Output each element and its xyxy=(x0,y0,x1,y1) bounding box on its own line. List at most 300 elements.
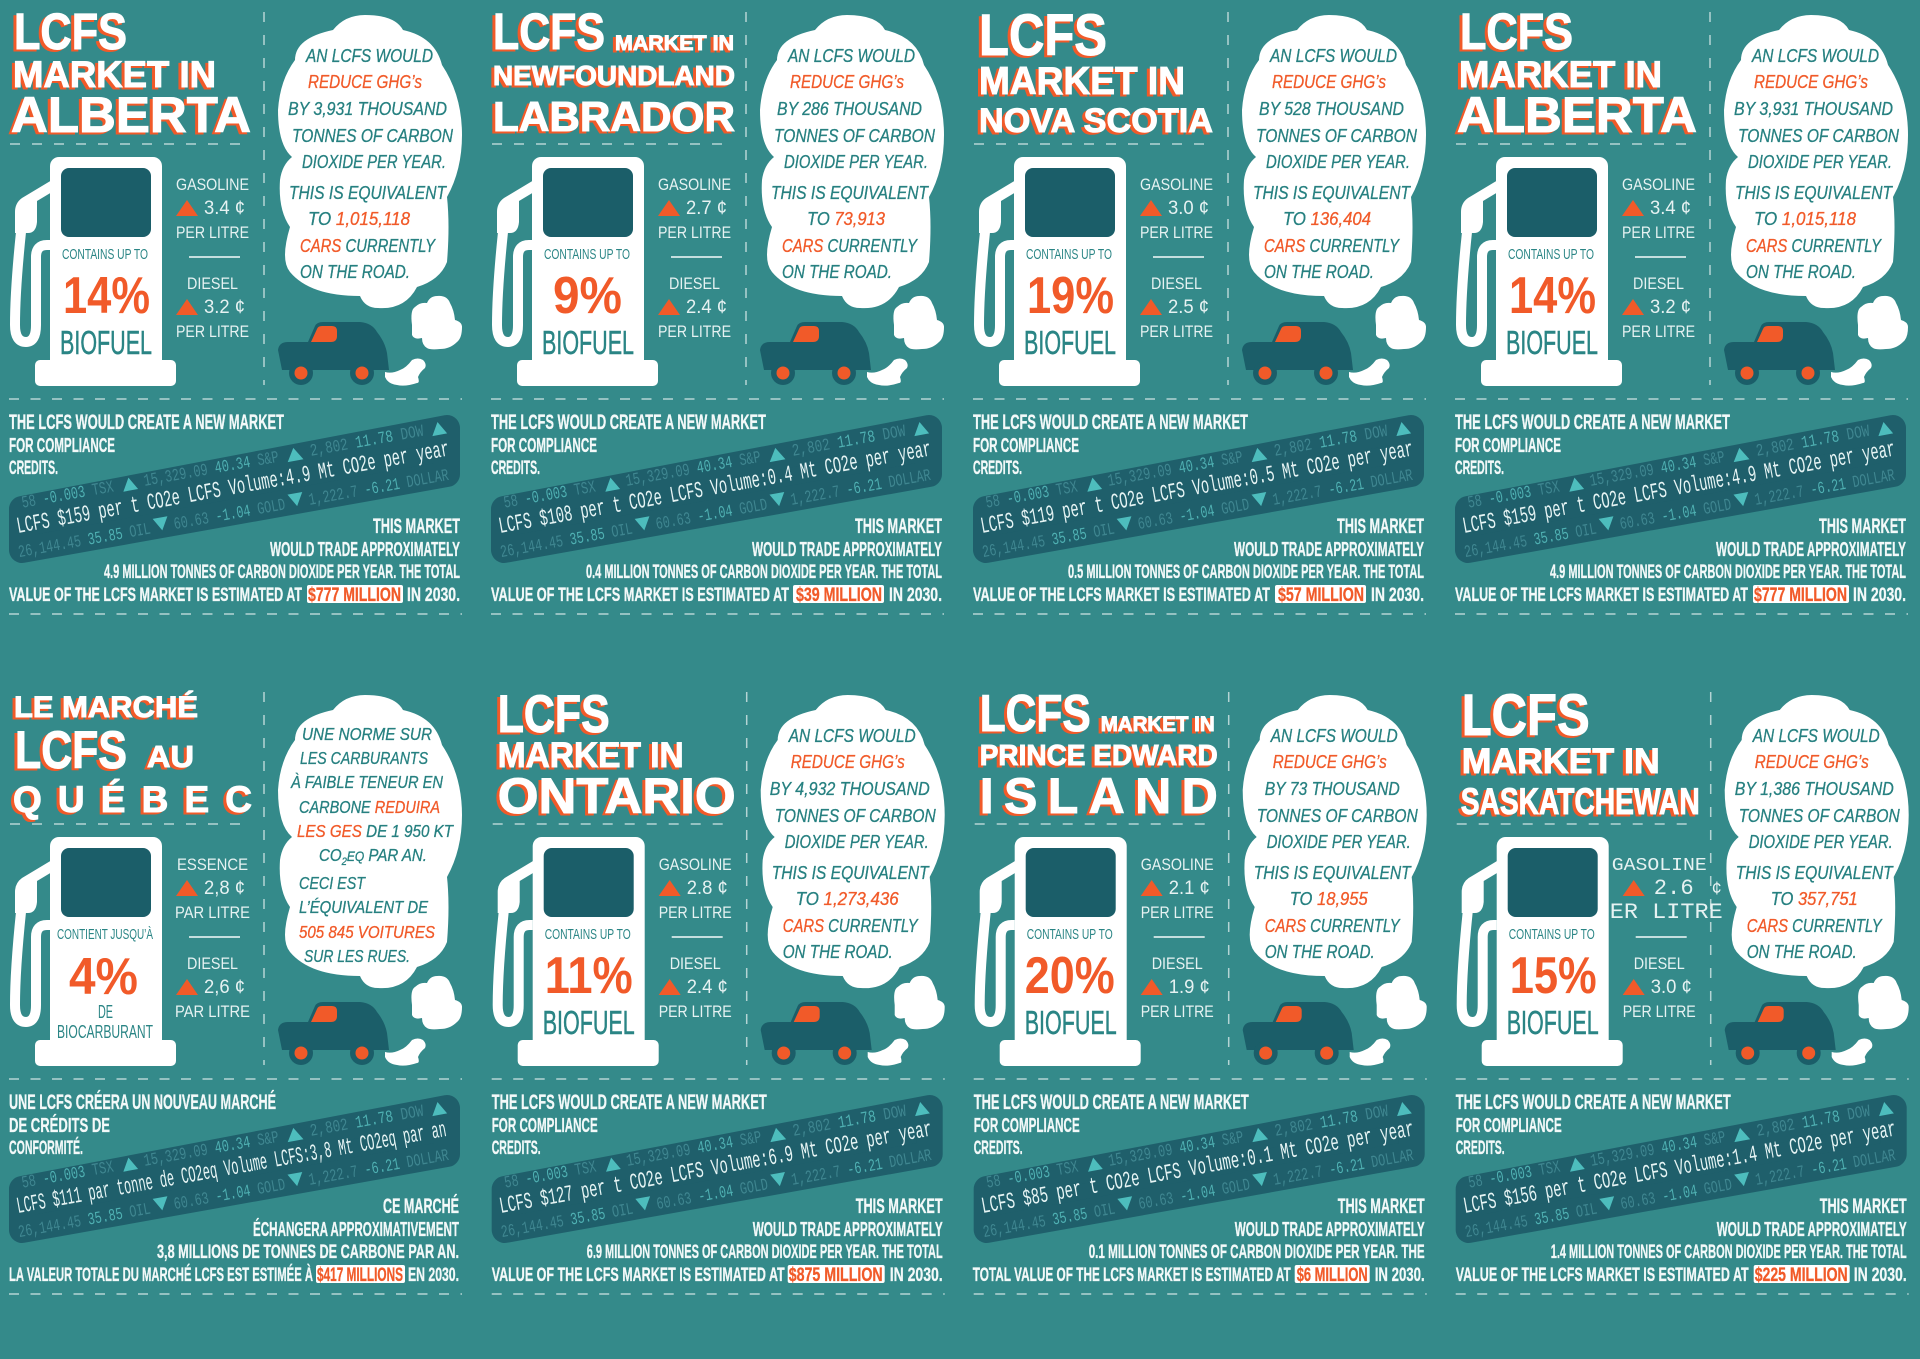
thought cloud with emissions text: BY 286 THOUSAND xyxy=(777,98,922,119)
icon: fuel pump with biofuel share: BIOFUEL xyxy=(1506,324,1598,361)
market value text xyxy=(973,515,1424,606)
thought cloud with emissions text: CARS CURRENTLY xyxy=(783,915,919,936)
fuel price increases: 2.7 ¢ xyxy=(686,198,727,219)
panel: Saskatchewan xyxy=(1455,683,1909,1294)
icon: fuel pump with biofuel share: BIOFUEL xyxy=(1024,324,1116,361)
heading: new market xyxy=(973,411,1248,479)
market value text: 3,8 MILLIONS DE TONNES DE CARBONE PAR AN. xyxy=(157,1242,459,1263)
icon: fuel pump with biofuel share: CONTAINS UP TO xyxy=(1509,926,1595,943)
market value text: IN 2030. xyxy=(1371,585,1424,606)
thought cloud with emissions text: UNE NORME SUR xyxy=(302,724,432,744)
thought cloud with emissions text: ON THE ROAD. xyxy=(782,261,892,282)
title: NOVA SCOTIA xyxy=(979,102,1213,140)
thought cloud with emissions text: ON THE ROAD. xyxy=(1265,941,1375,962)
title: MARKET IN xyxy=(1459,54,1662,95)
stock ticker band: 1,222.7 -6.21 DOLLAR xyxy=(789,467,932,511)
market value text: $777 MILLION xyxy=(308,585,401,606)
market value text: $417 MILLIONS xyxy=(317,1265,403,1286)
fuel price increases: GASOLINE xyxy=(1612,856,1707,876)
market value text: 6.9 MILLION TONNES OF CARBON DIOXIDE PER YEAR. THE TOTAL xyxy=(587,1242,943,1263)
stock ticker band: 15,329.09 40.34 S&P xyxy=(1588,449,1727,492)
thought cloud with emissions text: LES GES DE 1 950 KT xyxy=(297,821,454,841)
title: LCFS xyxy=(1460,3,1573,60)
fuel price increases: 3.2 ¢ xyxy=(204,297,245,318)
fuel price increases: 2.1 ¢ xyxy=(1169,878,1210,899)
thought cloud with emissions text: DIOXIDE PER YEAR. xyxy=(1266,151,1410,172)
market value text: CE MARCHÉ xyxy=(383,1195,459,1218)
icon: fuel pump with biofuel share: BIOFUEL xyxy=(542,324,634,361)
thought cloud with emissions text: ON THE ROAD. xyxy=(783,941,893,962)
stock ticker band: 60.63 -1.04 GOLD xyxy=(654,496,769,535)
icon: fuel pump with biofuel share: BIOFUEL xyxy=(1025,1004,1117,1041)
fuel price increases: DIESEL xyxy=(669,275,720,293)
thought cloud with emissions text: L’ÉQUIVALENT DE xyxy=(299,897,428,917)
stock ticker band: 15,329.09 40.34 S&P xyxy=(142,449,281,492)
market value text: 4.9 MILLION TONNES OF CARBON DIOXIDE PER YEAR. THE TOTAL xyxy=(104,562,460,583)
thought cloud with emissions text: TO 1,273,436 xyxy=(796,888,899,909)
heading: new market: CREDITS. xyxy=(491,458,540,479)
thought cloud with emissions text: REDUCE GHG’s xyxy=(308,71,422,92)
stock ticker band: 60.63 -1.04 GOLD xyxy=(172,496,287,535)
heading: new market: CREDITS. xyxy=(1456,1138,1505,1159)
thought cloud with emissions text: CARS CURRENTLY xyxy=(1264,235,1400,256)
stock ticker band: 15,329.09 40.34 S&P xyxy=(142,1129,281,1172)
icon: fuel pump with biofuel share: CONTAINS UP TO xyxy=(1508,246,1594,263)
market value text: VALUE OF THE LCFS MARKET IS ESTIMATED AT xyxy=(1455,585,1748,606)
title: LCFS xyxy=(15,721,127,780)
heading: new market: CREDITS. xyxy=(9,458,58,479)
title: LCFS xyxy=(979,3,1107,68)
fuel price increases: PER LITRE xyxy=(658,224,731,242)
icon: fuel pump with biofuel share: CONTIENT JUSQU’À xyxy=(57,926,153,943)
icon: fuel pump with biofuel share: 19% xyxy=(1027,267,1114,325)
thought cloud with emissions text: DIOXIDE PER YEAR. xyxy=(785,831,929,852)
market value text xyxy=(492,1195,943,1286)
thought cloud with emissions text xyxy=(1243,695,1427,988)
heading: new market: CREDITS. xyxy=(973,458,1022,479)
fuel price increases: 2.8 ¢ xyxy=(687,878,728,899)
heading: new market: THE LCFS WOULD CREATE A NEW MARKET xyxy=(9,411,284,434)
title xyxy=(11,3,251,143)
heading: new market: THE LCFS WOULD CREATE A NEW MARKET xyxy=(1456,1091,1731,1114)
market value text: IN 2030. xyxy=(890,1265,943,1286)
stock ticker band: 2,802 11.78 DOW xyxy=(1273,423,1390,462)
icon: fuel pump with biofuel share xyxy=(1462,837,1623,1066)
thought cloud with emissions text: CARBONE REDUIRA xyxy=(299,797,440,817)
fuel price increases: PER LITRE xyxy=(659,904,732,922)
market value text: THIS MARKET xyxy=(855,515,942,538)
thought cloud with emissions text: AN LCFS WOULD xyxy=(788,725,916,746)
title: MARKET IN xyxy=(615,32,734,55)
stock ticker band: 58 -0.003 TSX xyxy=(503,1159,598,1194)
stock ticker band: 15,329.09 40.34 S&P xyxy=(1106,449,1245,492)
stock ticker band: 60.63 -1.04 GOLD xyxy=(1619,1176,1734,1215)
thought cloud with emissions text: 2 xyxy=(341,856,347,868)
fuel price increases xyxy=(658,176,731,341)
icon: fuel pump with biofuel share: 14% xyxy=(63,267,150,325)
panel: Québec xyxy=(8,690,462,1294)
fuel price increases: 2.5 ¢ xyxy=(1168,297,1209,318)
heading: new market xyxy=(974,1091,1249,1159)
stock ticker band: 26,144.45 35.85 OIL xyxy=(1464,1201,1599,1243)
stock ticker band xyxy=(490,419,938,563)
stock ticker band: 2,802 11.78 DOW xyxy=(791,1103,909,1142)
market value text: WOULD TRADE APPROXIMATELY xyxy=(752,539,942,561)
stock ticker band: 1,222.7 -6.21 DOLLAR xyxy=(307,1147,450,1191)
heading: new market: DE CRÉDITS DE xyxy=(9,1114,110,1137)
market value text: $225 MILLION xyxy=(1755,1265,1848,1286)
thought cloud with emissions text: TONNES OF CARBON xyxy=(1256,125,1418,146)
market value text xyxy=(9,515,460,606)
title: ISLAND xyxy=(980,768,1218,824)
title: ALBERTA xyxy=(11,87,251,143)
title: SASKATCHEWAN xyxy=(1461,781,1700,822)
icon: fuel pump with biofuel share: 11% xyxy=(545,947,633,1005)
thought cloud with emissions text xyxy=(278,15,462,308)
heading: new market: FOR COMPLIANCE xyxy=(1456,1115,1562,1137)
thought cloud with emissions text: AN LCFS WOULD xyxy=(305,45,433,66)
icon: fuel pump with biofuel share: DE xyxy=(98,1002,113,1022)
thought cloud with emissions text xyxy=(1725,695,1909,988)
thought cloud with emissions text xyxy=(278,695,462,988)
title xyxy=(498,685,736,824)
fuel price increases: 2.4 ¢ xyxy=(686,297,727,318)
panel: Ontario xyxy=(491,685,945,1294)
stock ticker band: 1,222.7 -6.21 DOLLAR xyxy=(790,1147,933,1191)
heading: new market: FOR COMPLIANCE xyxy=(973,435,1079,457)
icon: car with exhaust xyxy=(1724,296,1908,386)
fuel price increases: DIESEL xyxy=(1634,955,1685,973)
thought cloud with emissions text: TO 1,015,118 xyxy=(1754,208,1857,229)
fuel price increases xyxy=(175,856,250,1021)
market value text: THIS MARKET xyxy=(1338,1195,1425,1218)
thought cloud with emissions text: CARS CURRENTLY xyxy=(1265,915,1401,936)
icon: car with exhaust xyxy=(1242,296,1426,386)
title xyxy=(979,3,1213,140)
title: MARKET IN xyxy=(498,736,684,775)
thought cloud with emissions text: AN LCFS WOULD xyxy=(1269,45,1397,66)
thought cloud with emissions text: ON THE ROAD. xyxy=(1747,941,1857,962)
fuel price increases: PER LITRE xyxy=(1623,1003,1696,1021)
thought cloud with emissions text: ON THE ROAD. xyxy=(300,261,410,282)
title: MARKET IN xyxy=(1101,713,1215,736)
stock ticker band: 26,144.45 35.85 OIL xyxy=(981,521,1116,563)
heading: new market: FOR COMPLIANCE xyxy=(492,1115,598,1137)
fuel price increases: DIESEL xyxy=(187,275,238,293)
market value text: IN 2030. xyxy=(407,585,460,606)
stock ticker band xyxy=(8,419,456,563)
thought cloud with emissions text: CARS CURRENTLY xyxy=(300,235,436,256)
fuel price increases: 3.0 ¢ xyxy=(1168,198,1209,219)
heading: new market xyxy=(9,411,284,479)
market value text: WOULD TRADE APPROXIMATELY xyxy=(1234,539,1424,561)
stock ticker band xyxy=(973,1099,1421,1243)
market value text: THIS MARKET xyxy=(856,1195,943,1218)
icon: fuel pump with biofuel share: 4% xyxy=(69,948,138,1006)
title xyxy=(980,685,1218,824)
thought cloud with emissions text: DIOXIDE PER YEAR. xyxy=(302,151,446,172)
icon: fuel pump with biofuel share xyxy=(497,157,658,386)
market value text: LA VALEUR TOTALE DU MARCHÉ LCFS EST ESTIMÉE À xyxy=(9,1264,313,1286)
stock ticker band xyxy=(1455,1099,1903,1243)
stock ticker band: LCFS $159 per t CO2e LCFS Volume:4.9 Mt CO2e per year xyxy=(15,437,451,540)
stock ticker band: 60.63 -1.04 GOLD xyxy=(1136,496,1251,535)
stock ticker band: 26,144.45 35.85 OIL xyxy=(17,1201,152,1243)
fuel price increases: 2,8 ¢ xyxy=(204,878,245,899)
thought cloud with emissions text: TONNES OF CARBON xyxy=(1257,805,1418,826)
icon: fuel pump with biofuel share xyxy=(980,837,1141,1066)
market value text: WOULD TRADE APPROXIMATELY xyxy=(753,1219,943,1241)
icon: fuel pump with biofuel share: CONTAINS UP TO xyxy=(1027,926,1113,943)
fuel price increases xyxy=(1140,176,1213,341)
fuel price increases: 2,6 ¢ xyxy=(204,977,245,998)
stock ticker band: 1,222.7 -6.21 DOLLAR xyxy=(1753,467,1896,511)
stock ticker band: 60.63 -1.04 GOLD xyxy=(1618,496,1733,535)
heading: new market: CONFORMITÉ. xyxy=(9,1137,83,1159)
thought cloud with emissions text: REDUCE GHG’s xyxy=(790,71,904,92)
icon: car with exhaust xyxy=(278,976,462,1066)
stock ticker band: 2,802 11.78 DOW xyxy=(1755,1103,1873,1142)
market value text xyxy=(1456,1195,1907,1286)
title: ONTARIO xyxy=(498,768,736,824)
thought cloud with emissions text: AN LCFS WOULD xyxy=(787,45,915,66)
stock ticker band: 15,329.09 40.34 S&P xyxy=(1107,1129,1245,1172)
thought cloud with emissions text: TO 18,955 xyxy=(1290,888,1368,909)
stock ticker band xyxy=(972,419,1420,563)
title: MARKET IN xyxy=(979,60,1185,103)
panel: Nova Scotia xyxy=(972,3,1426,614)
icon: fuel pump with biofuel share: 15% xyxy=(1510,947,1597,1005)
market value text: VALUE OF THE LCFS MARKET IS ESTIMATED AT xyxy=(491,585,789,606)
market value text: $39 MILLION xyxy=(796,585,882,606)
icon: fuel pump with biofuel share xyxy=(979,157,1140,386)
thought cloud with emissions text: CARS CURRENTLY xyxy=(782,235,918,256)
thought cloud with emissions text: BY 3,931 THOUSAND xyxy=(1734,98,1893,119)
heading: new market: THE LCFS WOULD CREATE A NEW MARKET xyxy=(1455,411,1730,434)
title: QUÉBEC xyxy=(13,779,252,820)
market value text: VALUE OF THE LCFS MARKET IS ESTIMATED AT xyxy=(1456,1265,1749,1286)
title: LE MARCHÉ xyxy=(14,690,198,724)
title: NEWFOUNDLAND xyxy=(493,60,735,91)
fuel price increases: 2.4 ¢ xyxy=(687,977,728,998)
fuel price increases: GASOLINE xyxy=(1141,856,1214,874)
thought cloud with emissions text: AN LCFS WOULD xyxy=(1751,45,1879,66)
title: MARKET IN xyxy=(1462,742,1660,781)
thought cloud with emissions text: REDUCE GHG’s xyxy=(1273,751,1387,772)
thought cloud with emissions text: TO 73,913 xyxy=(807,208,886,229)
heading: new market xyxy=(1455,411,1730,479)
stock ticker band: 15,329.09 40.34 S&P xyxy=(624,449,763,492)
thought cloud with emissions text: BY 528 THOUSAND xyxy=(1259,98,1404,119)
thought cloud with emissions text: REDUCE GHG’s xyxy=(1754,71,1868,92)
icon: car with exhaust xyxy=(761,976,945,1066)
fuel price increases: ER LITRE xyxy=(1610,900,1723,925)
icon: fuel pump with biofuel share: 9% xyxy=(553,267,622,325)
title xyxy=(1457,3,1697,143)
icon: car with exhaust xyxy=(278,296,462,386)
market value text: IN 2030. xyxy=(889,585,942,606)
market value text: $777 MILLION xyxy=(1754,585,1847,606)
fuel price increases: PER LITRE xyxy=(1622,323,1695,341)
panel: Alberta xyxy=(8,3,462,614)
thought cloud with emissions text: BY 3,931 THOUSAND xyxy=(288,98,447,119)
title: AU xyxy=(147,739,194,774)
fuel price increases: ESSENCE xyxy=(177,856,248,874)
heading: new market: FOR COMPLIANCE xyxy=(1455,435,1561,457)
thought cloud with emissions text: TO 136,404 xyxy=(1283,208,1371,229)
stock ticker band: 60.63 -1.04 GOLD xyxy=(1137,1176,1252,1215)
stock ticker band: 1,222.7 -6.21 DOLLAR xyxy=(307,467,450,511)
icon: fuel pump with biofuel share: BIOFUEL xyxy=(543,1004,635,1041)
thought cloud with emissions text: REDUCE GHG’s xyxy=(1755,751,1869,772)
heading: new market: THE LCFS WOULD CREATE A NEW MARKET xyxy=(492,1091,767,1114)
stock ticker band: 58 -0.003 TSX xyxy=(20,1159,115,1194)
title xyxy=(493,3,735,140)
fuel price increases: PAR LITRE xyxy=(175,904,250,922)
market value text xyxy=(9,1195,459,1286)
panel: Prince Edward Island xyxy=(973,685,1427,1294)
heading: new market xyxy=(9,1091,276,1159)
stock ticker band: 26,144.45 35.85 OIL xyxy=(982,1201,1117,1243)
market value text: TOTAL VALUE OF THE LCFS MARKET IS ESTIMATED AT xyxy=(973,1265,1291,1286)
title xyxy=(13,690,252,820)
icon: fuel pump with biofuel share: CONTAINS UP TO xyxy=(544,246,630,263)
fuel price increases: PAR LITRE xyxy=(175,1003,250,1021)
thought cloud with emissions text: À FAIBLE TENEUR EN xyxy=(290,772,443,792)
thought cloud with emissions text: TO 1,015,118 xyxy=(308,208,411,229)
market value text: VALUE OF THE LCFS MARKET IS ESTIMATED AT xyxy=(492,1265,785,1286)
stock ticker band: 26,144.45 35.85 OIL xyxy=(499,521,634,563)
thought cloud with emissions text: ON THE ROAD. xyxy=(1264,261,1374,282)
market value text: 0.4 MILLION TONNES OF CARBON DIOXIDE PER YEAR. THE TOTAL xyxy=(586,562,942,583)
thought cloud with emissions text: THIS IS EQUIVALENT xyxy=(289,182,447,203)
icon: fuel pump with biofuel share: CONTAINS UP TO xyxy=(545,926,631,943)
fuel price increases: PER LITRE xyxy=(658,323,731,341)
fuel price increases: PER LITRE xyxy=(176,323,249,341)
market value text: $57 MILLION xyxy=(1278,585,1364,606)
title: LCFS xyxy=(14,3,127,60)
fuel price increases: PER LITRE xyxy=(1141,904,1214,922)
stock ticker band: 58 -0.003 TSX xyxy=(1467,1159,1562,1194)
fuel price increases: PER LITRE xyxy=(1140,224,1213,242)
stock ticker band: LCFS $127 per t CO2e LCFS Volume:6.9 Mt CO2e per year xyxy=(497,1117,934,1220)
fuel price increases: PER LITRE xyxy=(1140,323,1213,341)
fuel price increases: DIESEL xyxy=(1151,275,1202,293)
stock ticker band: 58 -0.003 TSX xyxy=(1466,479,1561,514)
thought cloud with emissions text xyxy=(761,695,945,988)
thought cloud with emissions text: TONNES OF CARBON xyxy=(775,805,936,826)
fuel price increases: GASOLINE xyxy=(176,176,249,194)
thought cloud with emissions text: BY 73 THOUSAND xyxy=(1265,778,1400,799)
fuel price increases xyxy=(1622,176,1695,341)
fuel price increases: GASOLINE xyxy=(1622,176,1695,194)
icon: fuel pump with biofuel share: BIOCARBURANT xyxy=(57,1022,153,1042)
fuel price increases: 3.4 ¢ xyxy=(204,198,245,219)
title: LCFS xyxy=(493,3,605,60)
heading: new market: CREDITS. xyxy=(974,1138,1023,1159)
stock ticker band: 2,802 11.78 DOW xyxy=(309,1103,426,1142)
market value text: $875 MILLION xyxy=(789,1265,883,1286)
market value text xyxy=(1455,515,1906,606)
icon: fuel pump with biofuel share: CONTAINS UP TO xyxy=(1026,246,1112,263)
fuel price increases: DIESEL xyxy=(1152,955,1203,973)
title: LABRADOR xyxy=(493,93,735,140)
icon: fuel pump with biofuel share xyxy=(1461,157,1622,386)
fuel price increases xyxy=(1610,856,1723,1021)
title: LCFS xyxy=(980,685,1091,743)
fuel price increases: DIESEL xyxy=(1633,275,1684,293)
stock ticker band: 60.63 -1.04 GOLD xyxy=(172,1176,287,1215)
fuel price increases: 3.2 ¢ xyxy=(1650,297,1691,318)
market value text: ÉCHANGERA APPROXIMATIVEMENT xyxy=(253,1218,459,1241)
stock ticker band: 1,222.7 -6.21 DOLLAR xyxy=(1272,1147,1415,1191)
stock ticker band: 58 -0.003 TSX xyxy=(20,479,115,514)
panel: Newfoundland Labrador xyxy=(490,3,944,614)
thought cloud with emissions text: THIS IS EQUIVALENT xyxy=(1254,862,1412,883)
thought cloud with emissions text: BY 4,932 THOUSAND xyxy=(770,778,930,799)
stock ticker band: 2,802 11.78 DOW xyxy=(791,423,908,462)
market value text: $6 MILLION xyxy=(1297,1265,1368,1286)
thought cloud with emissions text: PAR AN. xyxy=(369,845,437,865)
market value text: EN 2030. xyxy=(408,1265,459,1286)
stock ticker band: 1,222.7 -6.21 DOLLAR xyxy=(1754,1147,1897,1191)
fuel price increases xyxy=(1141,856,1214,1021)
thought cloud with emissions text: THIS IS EQUIVALENT xyxy=(1736,862,1894,883)
thought cloud with emissions text xyxy=(1724,15,1908,308)
market value text: IN 2030. xyxy=(1375,1265,1425,1286)
heading: new market: FOR COMPLIANCE xyxy=(974,1115,1080,1137)
fuel price increases: 1.9 ¢ xyxy=(1169,977,1210,998)
icon: fuel pump with biofuel share xyxy=(15,157,176,386)
market value text: 0.5 MILLION TONNES OF CARBON DIOXIDE PER YEAR. THE TOTAL xyxy=(1068,562,1424,583)
stock ticker band xyxy=(8,1099,456,1243)
stock ticker band: LCFS $108 per t CO2e LCFS Volume:0.4 Mt CO2e per year xyxy=(497,437,933,540)
thought cloud with emissions text: TO 357,751 xyxy=(1771,888,1858,909)
icon: car with exhaust xyxy=(760,296,944,386)
heading: new market xyxy=(492,1091,767,1159)
icon: fuel pump with biofuel share xyxy=(498,837,659,1066)
market value text: THIS MARKET xyxy=(1337,515,1424,538)
stock ticker band: 15,329.09 40.34 S&P xyxy=(625,1129,763,1172)
title: LCFS xyxy=(498,685,610,744)
stock ticker band: 60.63 -1.04 GOLD xyxy=(655,1176,770,1215)
stock ticker band: LCFS $85 per t CO2e LCFS Volume:0.1 Mt CO2e per year xyxy=(979,1117,1416,1220)
thought cloud with emissions text: REDUCE GHG’s xyxy=(1272,71,1386,92)
thought cloud with emissions text: DIOXIDE PER YEAR. xyxy=(784,151,928,172)
fuel price increases: 3.0 ¢ xyxy=(1651,977,1692,998)
heading: new market: THE LCFS WOULD CREATE A NEW MARKET xyxy=(973,411,1248,434)
fuel price increases: 3.4 ¢ xyxy=(1650,198,1691,219)
heading: new market: FOR COMPLIANCE xyxy=(491,435,597,457)
heading: new market: THE LCFS WOULD CREATE A NEW MARKET xyxy=(491,411,766,434)
heading: new market: CREDITS. xyxy=(492,1138,541,1159)
stock ticker band: 26,144.45 35.85 OIL xyxy=(500,1201,635,1243)
title: LCFS xyxy=(1462,683,1590,748)
icon: fuel pump with biofuel share: 20% xyxy=(1025,947,1115,1005)
thought cloud with emissions text: CARS CURRENTLY xyxy=(1746,235,1882,256)
stock ticker band xyxy=(491,1099,939,1243)
thought cloud with emissions text: THIS IS EQUIVALENT xyxy=(1735,182,1893,203)
icon: car with exhaust xyxy=(1243,976,1427,1066)
thought cloud with emissions text: EQ xyxy=(347,848,364,864)
thought cloud with emissions text: BY 1,386 THOUSAND xyxy=(1735,778,1894,799)
stock ticker band: 15,329.09 40.34 S&P xyxy=(1589,1129,1727,1172)
market value text: VALUE OF THE LCFS MARKET IS ESTIMATED AT xyxy=(9,585,302,606)
market value text: WOULD TRADE APPROXIMATELY xyxy=(1235,1219,1425,1241)
icon: car with exhaust xyxy=(1725,976,1909,1066)
stock ticker band: LCFS $111 par tonne de CO2eq Volume LCFS:3,8 Mt CO2eq par an xyxy=(15,1117,448,1220)
fuel price increases: 2.6 xyxy=(1654,876,1694,901)
